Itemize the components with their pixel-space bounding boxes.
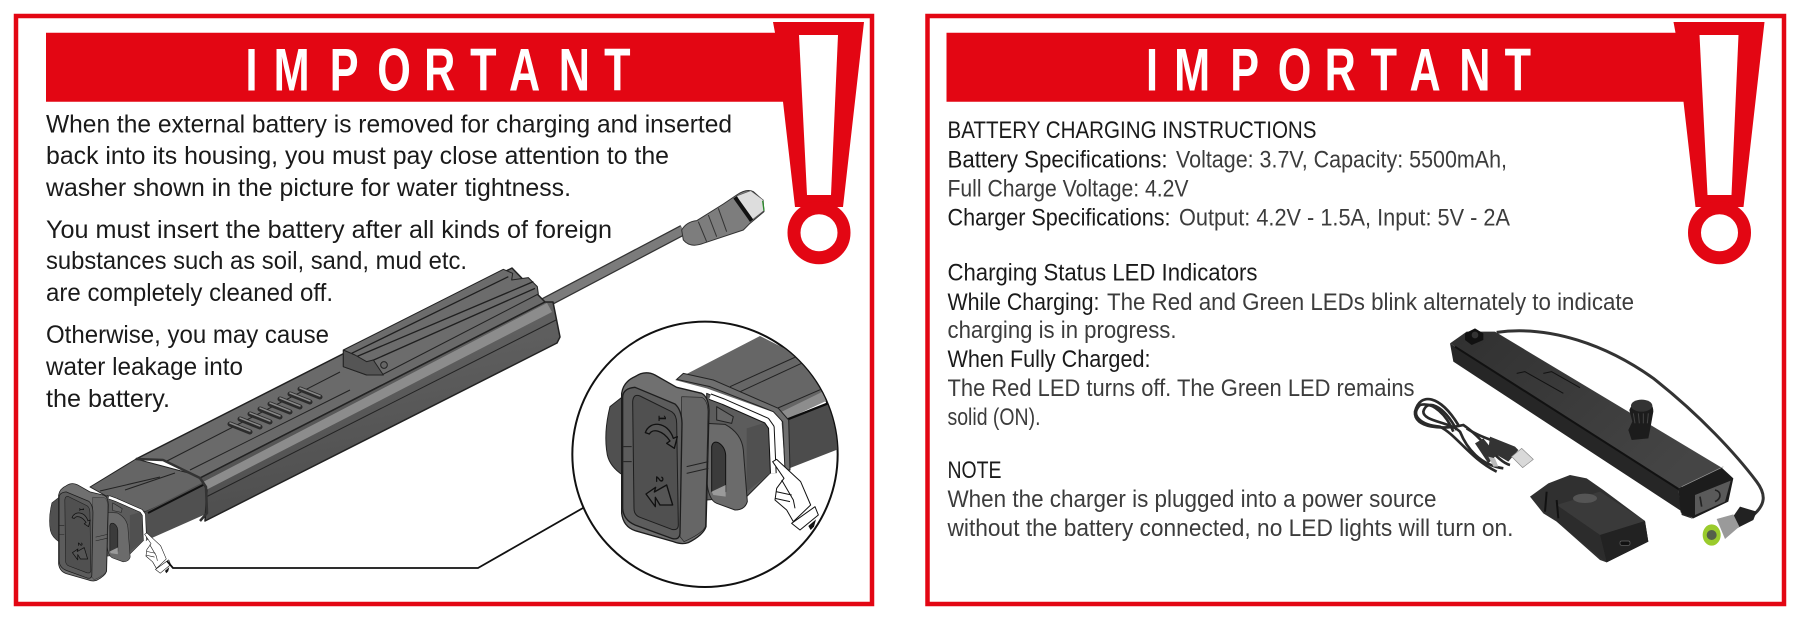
- vent slots: [230, 388, 320, 432]
- battery specifications text: [948, 117, 1510, 232]
- narrow front section: [90, 459, 215, 541]
- knob: [1628, 400, 1653, 440]
- LED indicators text: The Red LED turns off. The Green LED remains: [948, 375, 1414, 402]
- right panel frame: [928, 16, 1784, 604]
- left instruction text: are completely cleaned off.: [46, 279, 333, 307]
- LED indicators text: charging is in progress.: [948, 317, 1176, 344]
- left instruction text: washer shown in the picture for water tightness.: [45, 174, 571, 202]
- coiled USB cable: [1415, 399, 1533, 472]
- green connector: [1703, 507, 1757, 546]
- LED indicators text: When Fully Charged:: [948, 346, 1150, 373]
- left instruction text: substances such as soil, sand, mud etc.: [46, 247, 467, 275]
- long external cable: [1497, 331, 1763, 515]
- LED indicators text: solid (ON).: [948, 404, 1040, 431]
- left instruction text: [45, 111, 732, 413]
- left heading banner with exclamation mark: [46, 22, 864, 258]
- LED indicators text: The Red and Green LEDs blink alternately to indicate: [1107, 289, 1634, 316]
- battery specifications text: BATTERY CHARGING INSTRUCTIONS: [948, 117, 1316, 144]
- battery specifications text: Battery Specifications:: [948, 147, 1168, 174]
- left instruction text: Otherwise, you may cause: [46, 321, 329, 349]
- left instruction text: When the external battery is removed for charging and inserted: [46, 111, 732, 139]
- front cap with washer and pointing hand: [50, 484, 171, 581]
- left instruction text: water leakage into: [45, 353, 243, 381]
- LED indicators text: [948, 260, 1634, 431]
- main housing: [136, 268, 560, 521]
- LED indicators text: While Charging:: [948, 289, 1100, 316]
- left instruction text: back into its housing, you must pay close attention to the: [46, 142, 669, 170]
- charger: [1530, 475, 1648, 562]
- magnified detail circle: [572, 322, 860, 587]
- right heading banner with exclamation mark: [946, 22, 1764, 258]
- battery body: [1450, 328, 1733, 519]
- right heading banner with exclamation mark: IMPORTANT: [1146, 38, 1531, 104]
- note text: When the charger is plugged into a power source: [948, 486, 1436, 513]
- product photo: battery, cable and charger: [1415, 328, 1763, 562]
- note text: without the battery connected, no LED lights will turn on.: [947, 515, 1514, 542]
- note text: [947, 457, 1514, 542]
- leader line: [167, 508, 583, 568]
- mounting rail: [343, 269, 538, 375]
- battery specifications text: Output: 4.2V - 1.5A, Input: 5V - 2A: [1179, 205, 1510, 232]
- battery specifications text: Voltage: 3.7V, Capacity: 5500mAh,: [1176, 147, 1507, 174]
- battery specifications text: Charger Specifications:: [948, 205, 1170, 232]
- LED indicators text: Charging Status LED Indicators: [948, 260, 1258, 287]
- left panel frame: [16, 16, 872, 604]
- left heading banner with exclamation mark: IMPORTANT: [246, 38, 631, 104]
- panel: right charging instructions: [928, 16, 1784, 604]
- battery specifications text: Full Charge Voltage: 4.2V: [948, 176, 1188, 203]
- cable and connector: [535, 191, 764, 308]
- panel: left important notice: [16, 16, 872, 604]
- left instruction text: You must insert the battery after all kinds of foreign: [46, 216, 612, 244]
- note text: NOTE: [948, 457, 1002, 484]
- battery illustration: [50, 191, 764, 581]
- left instruction text: the battery.: [46, 385, 170, 413]
